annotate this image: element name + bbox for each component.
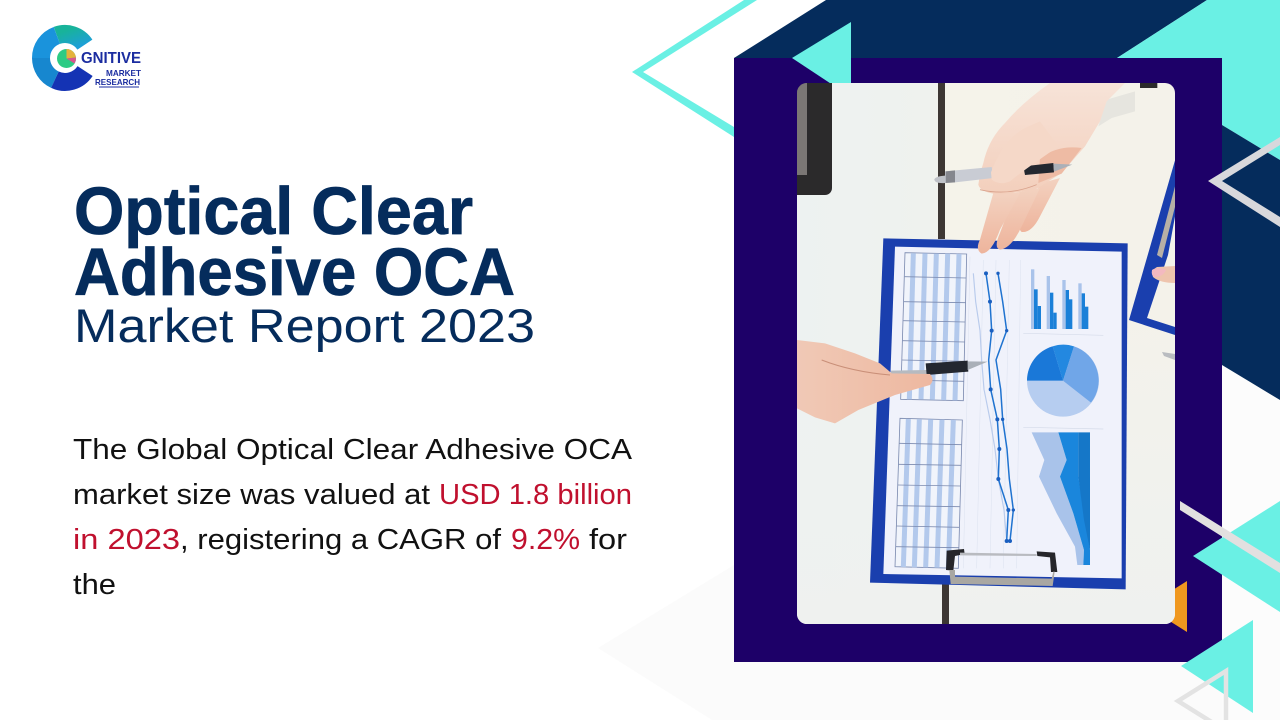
body text: in 2023 [73,524,180,556]
lower hand holding pen [797,340,988,423]
right clipboard [1129,160,1175,360]
logo wordmark [81,50,142,87]
clip hardware [946,549,1057,586]
body text: the [73,569,116,601]
orange accent [1168,581,1187,632]
title: Market Report 2023 [74,299,535,352]
logo wordmark: GNITIVE [81,50,141,67]
body text: market size was valued at [73,479,430,511]
teal right triangle [1193,501,1280,612]
title: Adhesive OCA [74,235,515,310]
logo pie [57,49,76,68]
logo wordmark: RESEARCH [95,77,140,87]
dark object at wrist [1140,83,1157,88]
tablet [797,83,832,195]
background: faint grey shapes [598,365,1280,720]
navy top shape [734,0,1207,58]
teal bottom triangle [1181,620,1253,713]
desk gap dark strip [938,83,949,624]
body text: 9.2% [511,524,580,556]
grey diagonal bar [1180,501,1280,573]
paper [883,247,1122,578]
logo ring [41,34,85,82]
teal triangle on frame [792,22,851,97]
title: Optical Clear [74,174,473,249]
grey outline chevron right [1208,137,1280,227]
bar chart [1023,269,1103,335]
title [74,174,535,352]
logo [41,34,142,87]
top hand holding pen [934,83,1157,254]
pie chart [1023,345,1103,429]
body text: for [589,524,627,556]
upper pen [934,163,1072,183]
dark indigo photo frame [734,58,1222,662]
area chart [1032,432,1090,565]
teal outline chevron [632,0,757,137]
top data table [901,253,967,401]
body text [73,434,633,601]
body text: USD 1.8 billion [439,479,632,511]
line chart [963,257,1021,568]
teal top-right shape [1117,0,1280,160]
clipboard [870,238,1128,589]
grey outline triangle [1178,671,1226,720]
bottom data table [895,418,962,568]
body text: , registering a CAGR of [180,524,502,556]
logo wordmark: MARKET [106,68,142,78]
photo: clipboard with charts on desk [785,70,1178,624]
body text: The Global Optical Clear Adhesive OCA [73,434,633,466]
navy right shape [1222,125,1280,400]
